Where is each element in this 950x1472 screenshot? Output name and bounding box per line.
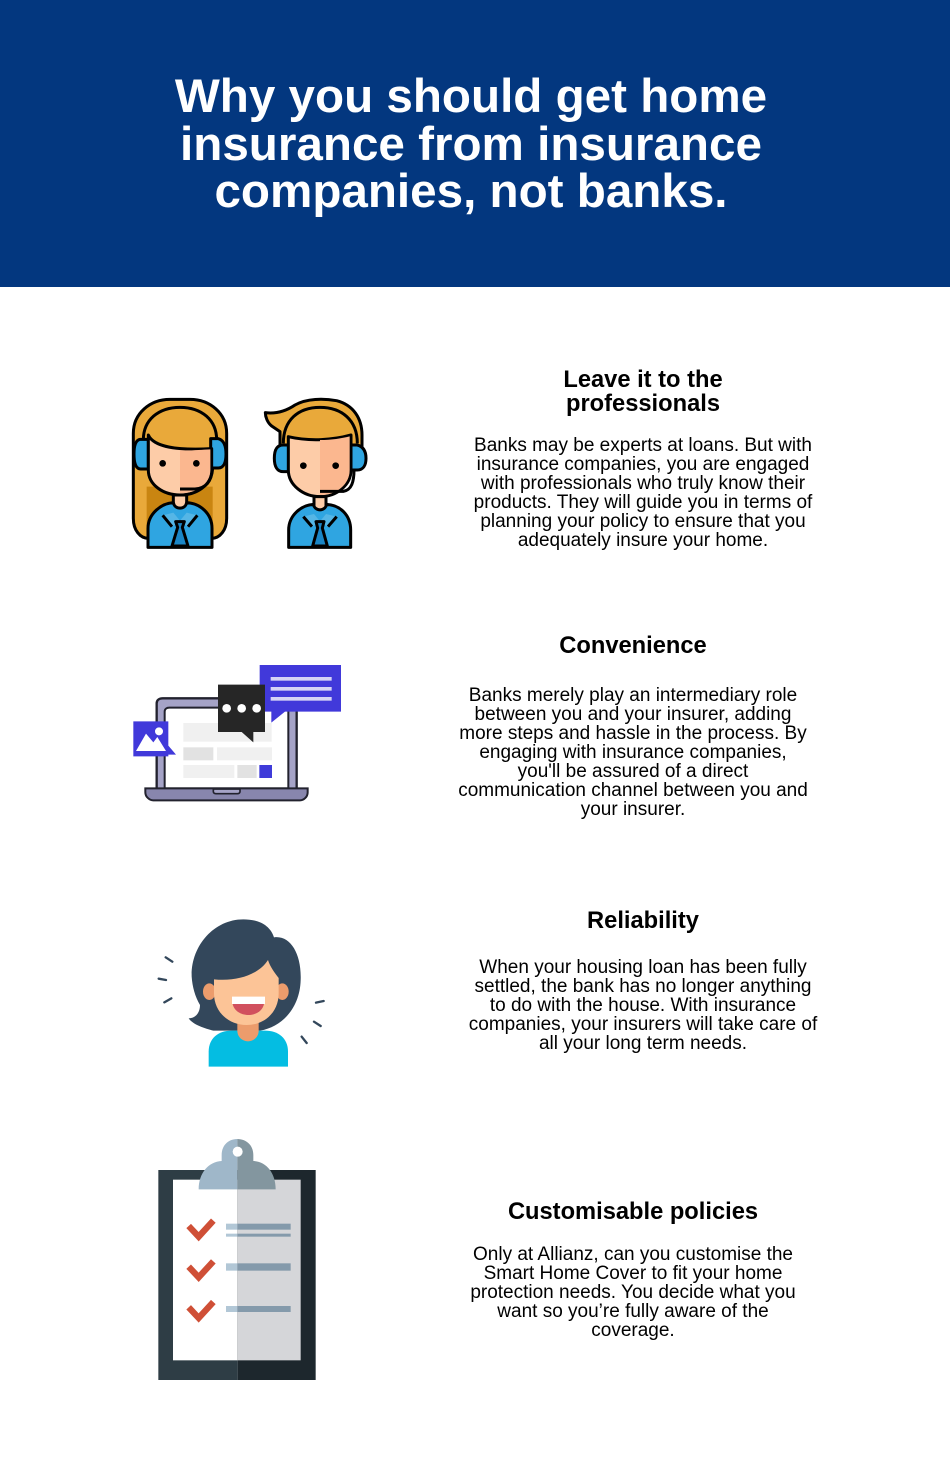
icon: smiling woman xyxy=(158,919,325,1067)
text: convenience: you'll be assured of a direct xyxy=(518,761,748,782)
text: leave it to the professionals: adequately insure your home. xyxy=(518,530,768,551)
list lines xyxy=(226,1224,291,1312)
text: reliability: to do with the house. With insurance xyxy=(490,995,796,1016)
title: companies, not banks. xyxy=(214,165,728,218)
hair xyxy=(189,919,301,1031)
clip xyxy=(199,1139,276,1189)
text: customisable policies: want so you’re fully aware of the xyxy=(497,1301,769,1322)
text: convenience: Banks merely play an intermediary role xyxy=(469,685,797,706)
text: leave it to the professionals: planning your policy to ensure that you xyxy=(480,511,806,532)
face xyxy=(214,960,279,1025)
text: leave it to the professionals xyxy=(474,435,812,551)
title: insurance from insurance xyxy=(180,118,762,170)
title xyxy=(174,70,767,218)
shirt xyxy=(209,1031,288,1067)
neck xyxy=(237,1020,259,1041)
text: customisable policies: Smart Home Cover to fit your home xyxy=(484,1263,782,1284)
screen content blocks xyxy=(183,723,272,778)
text: reliability xyxy=(469,957,818,1054)
heading: reliability: Reliability xyxy=(587,908,699,934)
blue speech bubble xyxy=(260,665,341,723)
heading: leave it to the professionals: professionals xyxy=(566,391,720,417)
icon: clipboard checklist xyxy=(158,1139,316,1380)
text: customisable policies: coverage. xyxy=(591,1320,675,1341)
text: leave it to the professionals: insurance companies, you are engaged xyxy=(477,454,809,475)
text: convenience: engaging with insurance companies, xyxy=(479,742,787,763)
text: reliability: companies, your insurers will take care of xyxy=(469,1014,817,1035)
ears xyxy=(203,983,216,1000)
heading: leave it to the professionals xyxy=(563,367,723,417)
text: reliability: When your housing loan has been fully xyxy=(479,957,807,978)
text: customisable policies: Only at Allianz, can you customise the xyxy=(473,1244,793,1265)
text: leave it to the professionals: products. They will guide you in terms of xyxy=(474,492,812,513)
text: customisable policies xyxy=(470,1244,796,1341)
icon: female agent xyxy=(133,399,227,547)
black speech bubble xyxy=(218,685,265,742)
text: convenience: communication channel between you and xyxy=(458,780,808,801)
laptop base xyxy=(145,788,308,800)
text: leave it to the professionals: with professionals who truly know their xyxy=(481,473,805,494)
text: leave it to the professionals: Banks may be experts at loans. But with xyxy=(474,435,812,456)
heading: leave it to the professionals: Leave it to the xyxy=(563,367,723,393)
title: Why you should get home xyxy=(175,70,767,123)
text: reliability: settled, the bank has no longer anything xyxy=(475,976,811,997)
smile xyxy=(232,997,265,1015)
text: convenience: your insurer. xyxy=(581,799,685,820)
icon: male agent xyxy=(265,399,366,547)
heading: convenience: Convenience xyxy=(559,633,707,659)
text: convenience xyxy=(458,685,808,820)
text: reliability: all your long term needs. xyxy=(539,1033,747,1054)
icon: call centre agents xyxy=(132,398,368,549)
image bubble xyxy=(133,721,176,756)
heading: customisable policies: Customisable policies xyxy=(508,1199,758,1225)
board xyxy=(158,1170,238,1380)
text: convenience: between you and your insurer, adding xyxy=(475,704,791,725)
paper xyxy=(173,1180,237,1360)
icon: laptop with chat bubbles xyxy=(133,665,341,802)
header banner xyxy=(0,0,950,287)
text: customisable policies: protection needs. You decide what you xyxy=(470,1282,796,1303)
sparkle lines xyxy=(159,957,324,1043)
checkmarks xyxy=(189,1221,213,1318)
laptop screen xyxy=(157,698,297,790)
text: convenience: more steps and hassle in the process. By xyxy=(459,723,807,744)
